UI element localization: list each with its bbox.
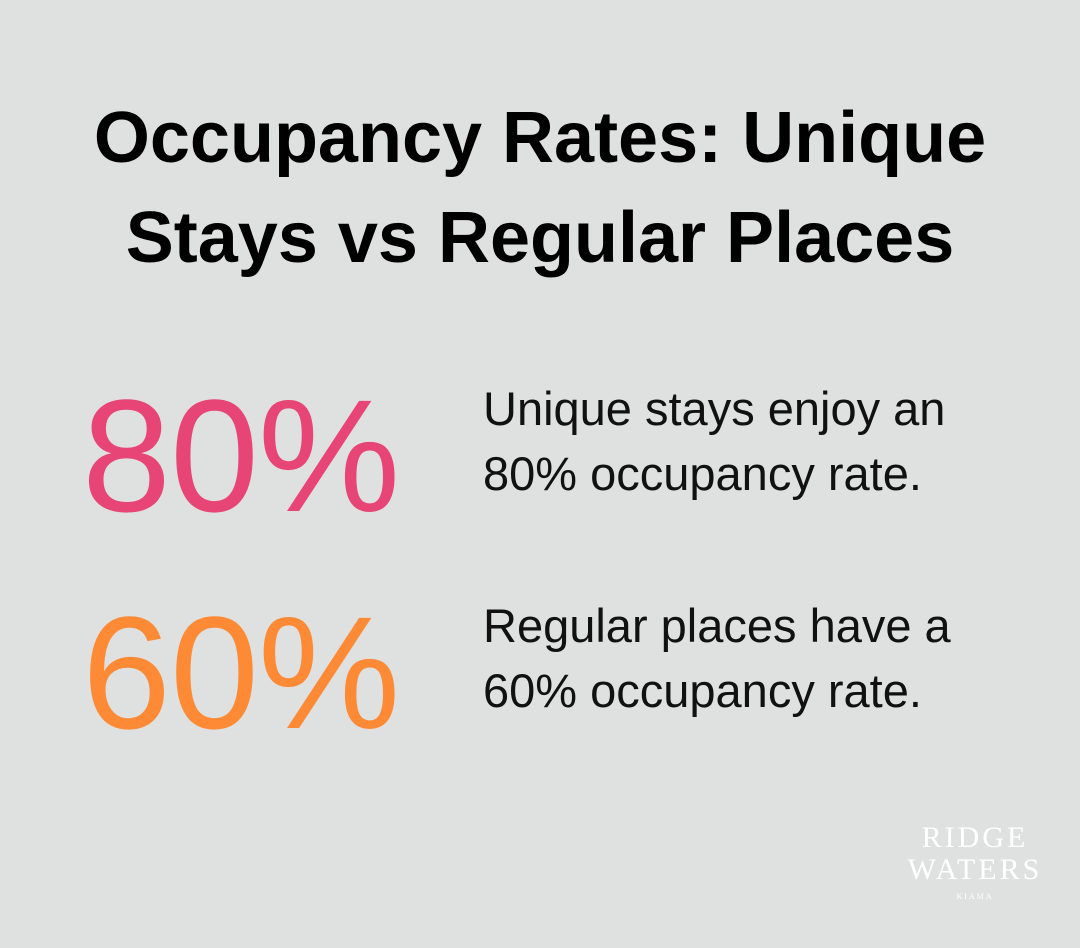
- title: Stays vs Regular Places: [126, 198, 954, 278]
- logo: RIDGE: [922, 821, 1028, 854]
- title: [94, 98, 986, 278]
- logo: WATERS: [908, 853, 1042, 886]
- logo: KIAMA: [956, 892, 994, 901]
- text: unique stays: 80% occupancy rate.: [483, 447, 922, 500]
- text: regular places: 60% occupancy rate.: [483, 664, 922, 717]
- title: Occupancy Rates: Unique: [94, 98, 986, 178]
- text: regular places: Regular places have a: [483, 599, 951, 652]
- stat: 80%: 80%: [82, 366, 399, 545]
- text: unique stays: Unique stays enjoy an: [483, 382, 945, 435]
- text: unique stays: [483, 382, 945, 500]
- logo: [908, 821, 1042, 901]
- text: regular places: [483, 599, 951, 717]
- stat: 60%: 60%: [82, 583, 399, 762]
